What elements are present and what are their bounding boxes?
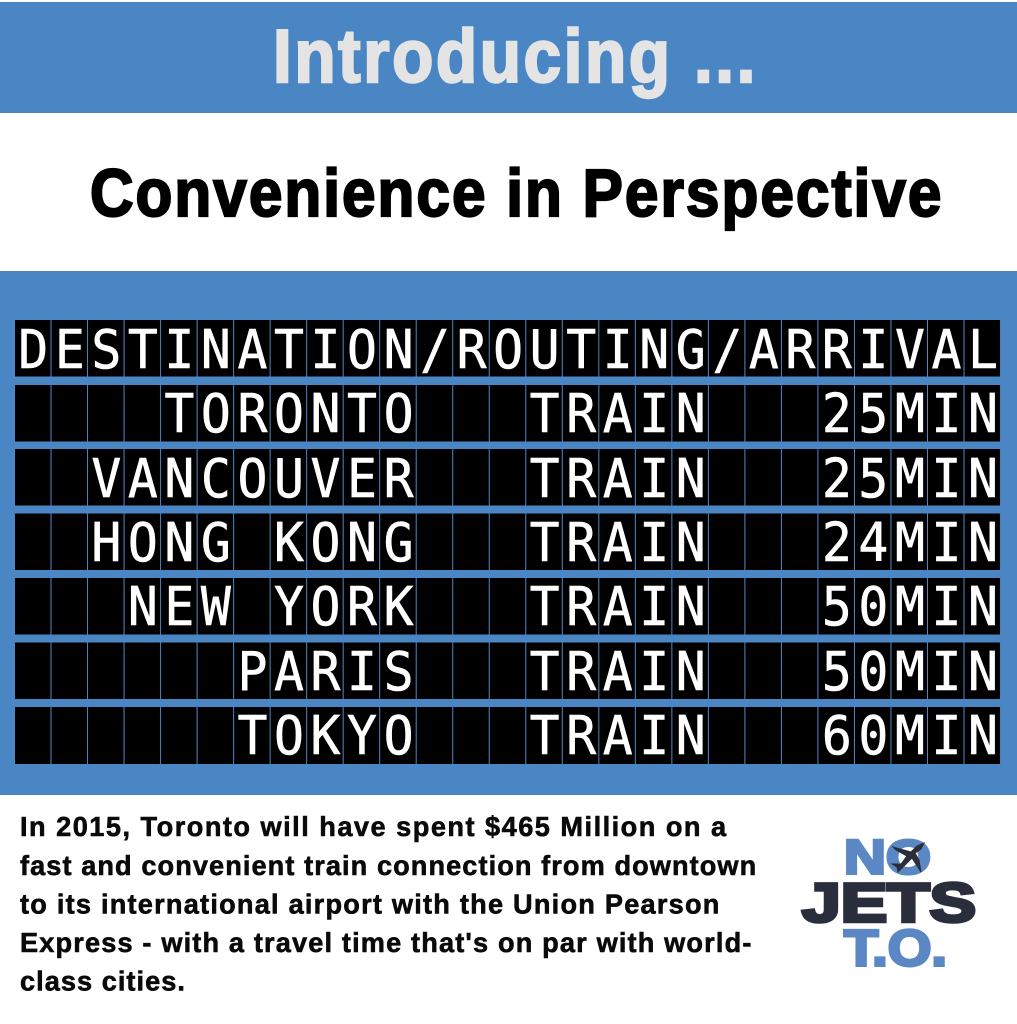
row: Hong Kong: HONG KONG TRAIN 24MIN [18,512,1005,574]
banner heading: Introducing ... [273,15,755,99]
icon: plane [892,843,924,872]
logo word: T.O.: T.O. [844,920,947,976]
logo word: NO: NO [844,832,931,884]
row: Tokyo: TOKYO TRAIN 60MIN [18,705,1005,767]
logo: No Jets T.O. [802,832,976,976]
title: Convenience in Perspective [90,155,941,231]
body paragraph: Express - with a travel time that's on par with world- [20,927,751,958]
row: New York: NEW YORK TRAIN 50MIN [18,576,1005,638]
body paragraph: class cities. [20,965,185,997]
top banner [0,2,1017,113]
body paragraph: to its international airport with the Union Pearson [20,888,719,920]
departures board panel [0,271,1017,795]
row: Toronto: TORONTO TRAIN 25MIN [18,383,1005,445]
row: Paris: PARIS TRAIN 50MIN [18,641,1005,703]
body paragraph: In 2015, Toronto will have spent $465 Million on a [20,811,727,842]
body paragraph [20,811,756,997]
logo word: JETS: JETS [802,872,976,934]
body paragraph: fast and convenient train connection from downtown [20,850,756,881]
board header row: DESTINATION/ROUTING/ARRIVAL [18,319,1005,381]
row: Vancouver: VANCOUVER TRAIN 25MIN [18,448,1005,510]
